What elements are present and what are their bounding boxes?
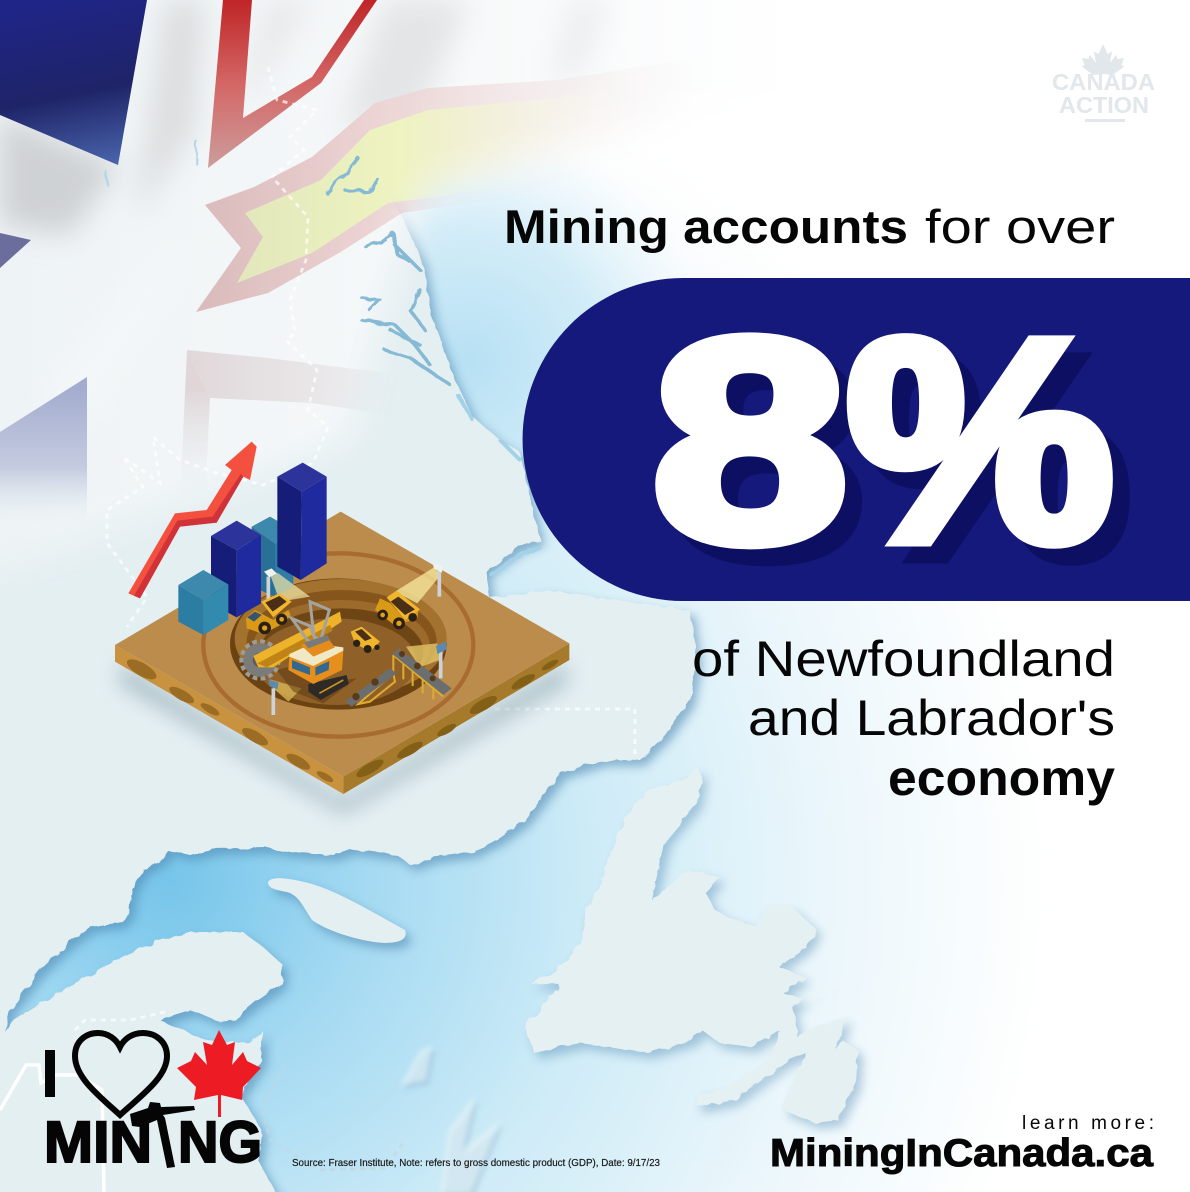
logo: Canada Action: CANADA	[1052, 69, 1155, 95]
panel: navy callout pill	[523, 278, 1190, 601]
bar chart: small teal bar	[178, 570, 228, 635]
mine: small dump truck	[351, 627, 380, 653]
flag: red V shape	[208, 0, 377, 168]
icon: red maple leaf	[177, 1030, 261, 1117]
illustration: isometric mine with bar chart	[115, 442, 569, 813]
heading: Mining accounts for over: Mining accounts	[504, 200, 908, 253]
mine: dump truck right	[375, 591, 420, 629]
logo: letter I	[45, 1050, 55, 1097]
mine: dump truck left	[246, 593, 292, 634]
logo: Canada Action: ACTION	[1059, 92, 1149, 118]
mine: floodlight beams	[268, 567, 441, 702]
callout number: 8%: 8	[652, 280, 848, 602]
map: fjords along the Labrador coast	[105, 140, 540, 575]
map: white border lines near logo	[0, 1065, 104, 1192]
callout number: 8%: %	[846, 280, 1114, 602]
mine: conveyor belts	[345, 648, 452, 707]
map: faint southern islands	[400, 1045, 504, 1192]
mine: bucket wheel excavator	[241, 602, 357, 703]
flag: blue triangles	[0, 0, 147, 530]
map: land masses of Atlantic Canada	[0, 0, 863, 1192]
text block: of Newfoundland and Labrador's economy: of Newfoundland	[692, 631, 1115, 687]
flag: gold arrow with red outline	[182, 77, 610, 450]
logo: word MINING: MIN	[44, 1110, 152, 1175]
call to action: learn more: MiningInCanada.ca	[770, 1132, 1153, 1175]
logo: heart outline	[75, 1033, 167, 1115]
mine: equipment (coordinates relative to pit)	[241, 563, 452, 715]
bar chart: teal bar behind	[252, 517, 293, 597]
background: top fade	[0, 0, 1190, 300]
mine: ground shadow	[120, 663, 567, 813]
background: coastal water tint	[200, 100, 800, 620]
arrow: red rising trend	[128, 442, 257, 598]
flag of Newfoundland and Labrador, faded	[0, 0, 640, 554]
call to action: learn more: learn more:	[1022, 1113, 1154, 1134]
call to action: learn more	[770, 1113, 1154, 1175]
flag: white cloth with folds	[0, 0, 640, 554]
logo: Canada Action	[1052, 44, 1155, 122]
source note: Source: Fraser Institute, Note: refers to gross domestic product (GDP), Date: 9/17/23	[292, 1157, 660, 1169]
mine: platform	[115, 512, 569, 794]
heading: Mining accounts for over	[504, 200, 1115, 253]
mine: outer ring	[203, 553, 473, 737]
text block: of Newfoundland and Labrador's economy: and Labrador's	[748, 690, 1115, 746]
logo: word MINING: NG	[178, 1110, 262, 1175]
callout number: 8%	[652, 280, 1114, 602]
text block: of Newfoundland and Labrador's economy	[692, 631, 1115, 806]
map: dotted provincial border	[75, 67, 635, 1170]
mine: open pit terraces	[230, 578, 447, 710]
icon: pickaxe forming the letter I	[130, 1102, 195, 1168]
logo: word MINING	[44, 1110, 262, 1175]
mine: floodlight poles	[264, 563, 447, 715]
bar chart: tall navy bar	[277, 463, 327, 580]
icon: Canada Action maple leaf	[1082, 44, 1124, 75]
platform: soil spots	[124, 656, 335, 784]
text block: of Newfoundland and Labrador's economy: economy	[888, 750, 1115, 806]
heading: Mining accounts for over: for over	[925, 200, 1115, 253]
bar chart: middle navy bar	[211, 521, 261, 617]
logo: I love mining	[44, 1030, 262, 1175]
